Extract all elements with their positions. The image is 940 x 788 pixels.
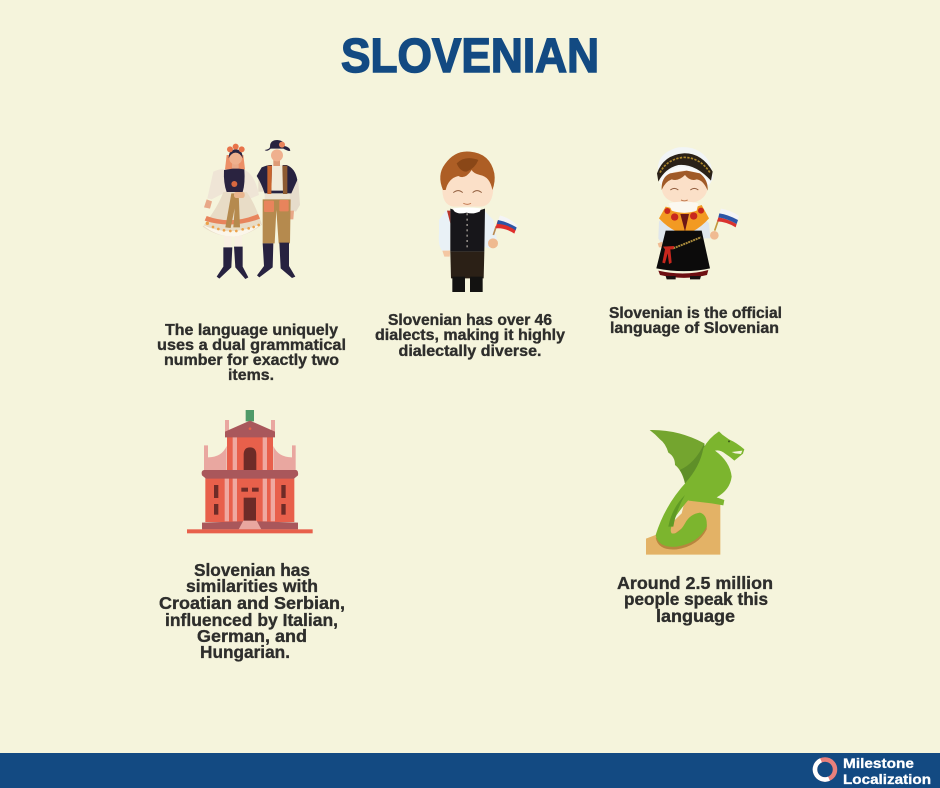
logo: Milestone Localization: Milestone (843, 755, 914, 771)
icon: woman with Slovenian flag (656, 147, 739, 279)
text: 2.5 million speakers: Around 2.5 million (617, 573, 773, 593)
text: similarities with Croatian and Serbian: German, and (197, 626, 307, 646)
text: similarities with Croatian and Serbian (159, 560, 345, 662)
text: 46 dialects: dialectally diverse. (398, 343, 542, 360)
text: 2.5 million speakers (617, 573, 773, 626)
text: similarities with Croatian and Serbian: Hungarian. (200, 642, 290, 662)
woman (203, 144, 262, 279)
text: 2.5 million speakers: language (656, 606, 735, 626)
text: dual grammatical number: items. (228, 367, 274, 384)
text: official language: language of Slovenian (610, 320, 779, 337)
icon: couple in folk costume (203, 140, 300, 279)
text: similarities with Croatian and Serbian: influenced by Italian, (165, 610, 338, 630)
text: similarities with Croatian and Serbian: Slovenian has (194, 560, 310, 580)
text: 46 dialects (375, 312, 565, 360)
text: dual grammatical number: uses a dual grammatical (157, 337, 346, 354)
footer bar (0, 753, 940, 788)
icon: Ljubljana dragon on pedestal (646, 430, 744, 555)
logo: Milestone Localization (815, 755, 931, 787)
text: similarities with Croatian and Serbian: similarities with (186, 576, 318, 596)
logo: Milestone Localization: Localization (843, 771, 931, 787)
man (257, 140, 300, 278)
text: official language (609, 305, 782, 337)
text: dual grammatical number (157, 322, 346, 384)
text: official language: Slovenian is the official (609, 305, 782, 322)
text: dual grammatical number: The language uniquely (165, 322, 338, 339)
icon: boy with Slovenian flag (439, 151, 518, 292)
text: similarities with Croatian and Serbian: Croatian and Serbian, (159, 593, 345, 613)
text: 46 dialects: Slovenian has over 46 (388, 312, 552, 329)
icon: baroque church building (187, 410, 313, 533)
text: 46 dialects: dialects, making it highly (375, 327, 565, 344)
text: 2.5 million speakers: people speak this (624, 589, 768, 609)
title: SLOVENIAN (341, 30, 599, 83)
text: dual grammatical number: number for exactly two (164, 352, 339, 369)
